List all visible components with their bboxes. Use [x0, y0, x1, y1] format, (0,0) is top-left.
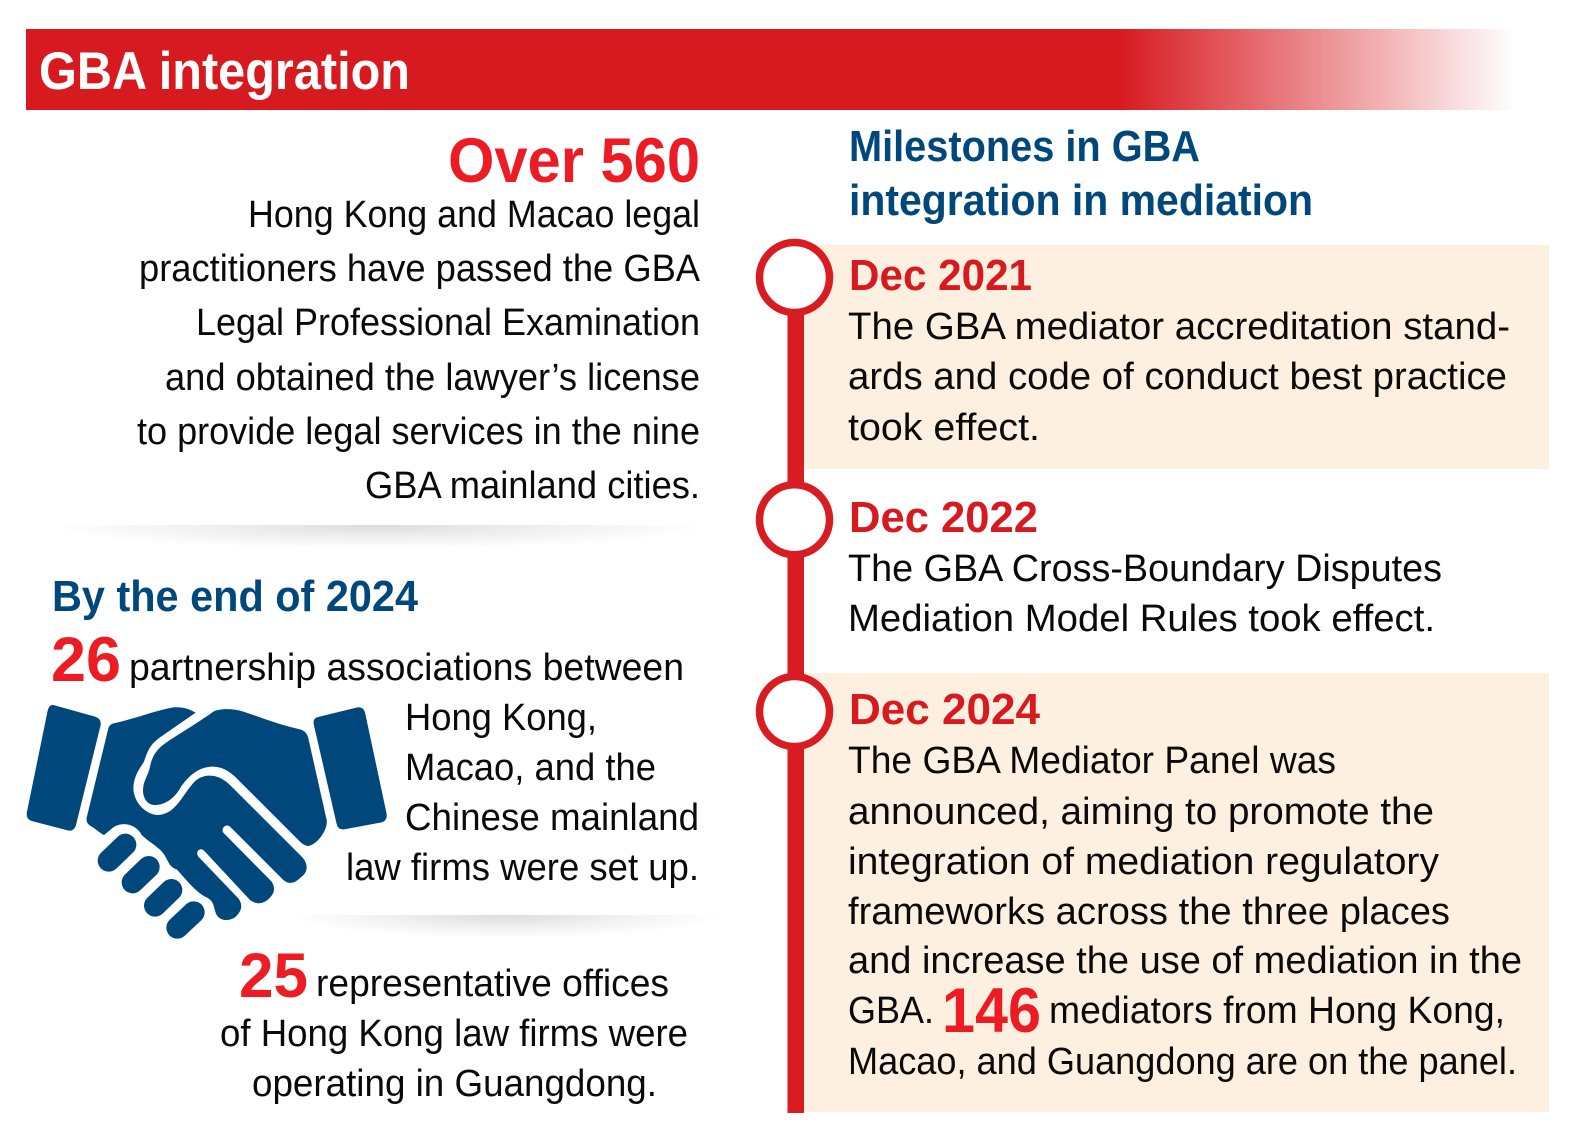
- title banner: [26, 29, 1516, 110]
- milestone: Dec 2024: GBA.: [848, 990, 934, 1032]
- milestone: Dec 2024: Dec 2024: [849, 685, 1041, 734]
- milestone: Dec 2024: [848, 685, 1522, 1083]
- stat: 25 representative offices: operating in Guangdong.: [252, 1063, 657, 1105]
- text block: practitioners description: to provide legal services in the nine: [137, 411, 700, 453]
- text block: practitioners description: practitioners have passed the GBA: [139, 248, 701, 290]
- milestone: Dec 2022: The GBA Cross-Boundary Disputes: [848, 548, 1442, 590]
- milestone: Dec 2022: Mediation Model Rules took effect.: [848, 598, 1435, 640]
- stat: 26 partnership associations: [51, 625, 699, 889]
- text block: practitioners description: Legal Professional Examination: [196, 302, 700, 344]
- text block: practitioners description: GBA mainland cities.: [365, 465, 700, 507]
- marker: Dec 2024: [760, 676, 830, 746]
- panel: by the end of 2024: [27, 572, 699, 928]
- stat: 26 partnership associations: 26: [51, 625, 121, 695]
- heading: Milestones in GBA integration in mediation: [849, 122, 1313, 225]
- milestone: Dec 2024: frameworks across the three places: [848, 891, 1450, 933]
- milestone: Dec 2021: ards and code of conduct best practice: [848, 356, 1507, 398]
- stat: 26 partnership associations: Chinese mainland: [405, 797, 699, 839]
- milestone: Dec 2021: Dec 2021: [849, 251, 1032, 300]
- milestone: Dec 2024: and increase the use of mediation in the: [848, 940, 1522, 982]
- panel: over 560 practitioners: [137, 126, 701, 507]
- marker: Dec 2022: [760, 485, 830, 555]
- stat: 26 partnership associations: partnership associations between: [129, 647, 684, 689]
- milestone: Dec 2024: integration of mediation regulatory: [848, 841, 1439, 883]
- milestone: Dec 2021: took effect.: [848, 407, 1040, 449]
- panel: Dec 2024 background: [804, 673, 1549, 1112]
- stat: 26 partnership associations: Hong Kong,: [405, 697, 597, 739]
- milestone: Dec 2022: Dec 2022: [849, 493, 1038, 542]
- big number: Over 560: Over 560: [448, 126, 700, 196]
- milestone: Dec 2024: The GBA Mediator Panel was: [848, 740, 1336, 782]
- title: GBA integration: [39, 42, 410, 101]
- stat: 25 representative offices: representative offices: [316, 963, 669, 1005]
- marker: Dec 2021: [760, 242, 830, 312]
- big number: 146: 146: [942, 976, 1041, 1046]
- icon: handshake: [27, 705, 387, 928]
- stat: 26 partnership associations: Macao, and the: [405, 747, 656, 789]
- milestone: Dec 2024: Macao, and Guangdong are on the panel.: [848, 1041, 1517, 1083]
- timeline: [760, 242, 830, 1113]
- text block: practitioners description: [137, 194, 701, 507]
- milestone: Dec 2021: [848, 251, 1510, 449]
- stat: 26 partnership associations: law firms were set up.: [346, 847, 699, 889]
- heading: By the end of 2024: By the end of 2024: [52, 572, 418, 621]
- stat: 25 representative offices: [220, 941, 688, 1105]
- stat: 25 representative offices: 25: [239, 941, 308, 1011]
- panel: Dec 2021 background: [804, 245, 1549, 469]
- heading: Milestones in GBA integration in mediation: Milestones in GBA: [849, 122, 1200, 171]
- heading: Milestones in GBA integration in mediation: integration in mediation: [849, 176, 1313, 225]
- milestone: Dec 2022: [848, 493, 1442, 640]
- text block: practitioners description: Hong Kong and Macao legal: [248, 194, 700, 236]
- stat: 25 representative offices: of Hong Kong law firms were: [220, 1013, 688, 1055]
- milestone: Dec 2024: mediators from Hong Kong,: [1049, 990, 1505, 1032]
- text block: practitioners description: and obtained the lawyer’s license: [165, 357, 700, 399]
- milestone: Dec 2024: announced, aiming to promote the: [848, 791, 1434, 833]
- milestone: Dec 2021: The GBA mediator accreditation stand-: [848, 306, 1510, 348]
